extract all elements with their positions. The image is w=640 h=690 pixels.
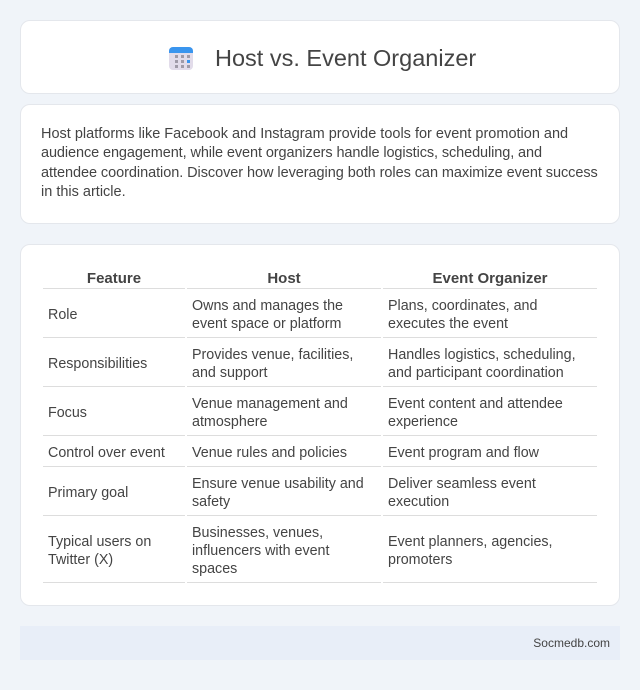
row: Role: Plans, coordinates, and [388, 298, 537, 314]
row: Control over event: Control over event [48, 445, 165, 461]
row: Focus: Venue management and [192, 396, 348, 412]
footer bar [20, 626, 620, 660]
row: Typical users: spaces [192, 561, 237, 577]
header: Feature: Feature [87, 270, 141, 287]
intro paragraph: in this article. [41, 184, 126, 200]
row: Responsibilities: Handles logistics, scheduling, [388, 347, 576, 363]
row: Focus: experience [388, 414, 458, 430]
row: Typical users: influencers with event [192, 543, 329, 559]
row: Typical users: Typical users on [48, 534, 151, 550]
row: Focus: Focus [48, 405, 87, 421]
row: Control over event: Venue rules and policies [192, 445, 347, 461]
row: Typical users: Event planners, agencies, [388, 534, 553, 550]
row: Role: event space or platform [192, 316, 341, 332]
intro paragraph: audience engagement, while event organizers handle logistics, scheduling, and [41, 145, 542, 161]
row: Role [48, 298, 537, 332]
row: Typical users: Twitter (X) [48, 552, 113, 568]
footer source text: Socmedb.com [533, 636, 610, 650]
row: Primary goal: execution [388, 494, 449, 510]
row: Role: Role [48, 307, 77, 323]
row: Responsibilities: and participant coordination [388, 365, 564, 381]
row: Role: Owns and manages the [192, 298, 343, 314]
row: Typical users: Businesses, venues, [192, 525, 323, 541]
header: Host: Host [267, 270, 301, 287]
intro paragraph: attendee coordination. Discover how leveraging both roles can maximize event success [41, 165, 598, 181]
icon: calendar [169, 47, 193, 70]
row: Focus: Event content and attendee [388, 396, 563, 412]
row: Control over event: Event program and flow [388, 445, 539, 461]
row: Responsibilities: Responsibilities [48, 356, 147, 372]
panel: title [20, 20, 620, 94]
row: Primary goal: safety [192, 494, 230, 510]
row: Primary goal [48, 476, 536, 510]
row: Primary goal: Primary goal [48, 485, 128, 501]
comparison table [43, 268, 597, 584]
row: Responsibilities: and support [192, 365, 268, 381]
row: Role: executes the event [388, 316, 508, 332]
row: Responsibilities: Provides venue, facilities, [192, 347, 353, 363]
row: Primary goal: Deliver seamless event [388, 476, 536, 492]
row: Typical users [48, 525, 553, 577]
intro paragraph: Host platforms like Facebook and Instagram provide tools for event promotion and [41, 126, 568, 142]
row: Focus: atmosphere [192, 414, 268, 430]
row: Typical users: promoters [388, 552, 452, 568]
row: Focus [48, 396, 563, 430]
panel: intro text [20, 104, 620, 224]
title text: Host vs. Event Organizer [215, 45, 476, 71]
row: Control over event [48, 445, 539, 461]
row: Primary goal: Ensure venue usability and [192, 476, 364, 492]
header: Event Organizer: Event Organizer [432, 270, 548, 287]
intro paragraph [41, 126, 598, 200]
row: Responsibilities [48, 347, 576, 381]
panel: comparison table [20, 244, 620, 606]
